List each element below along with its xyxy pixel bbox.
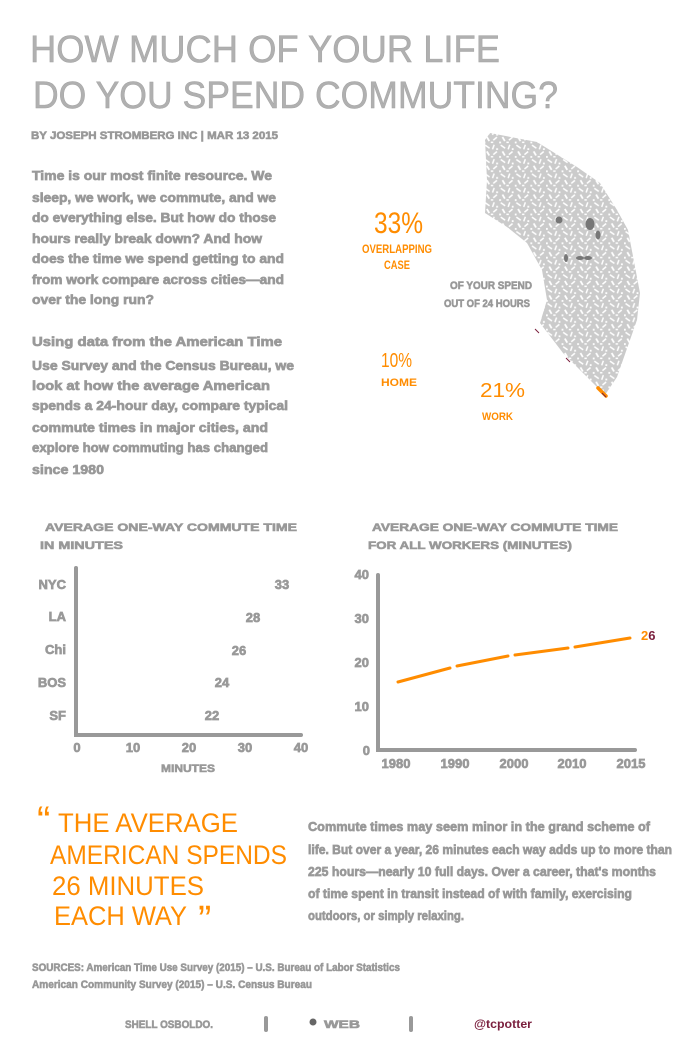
label: sleep share caption: OVERLAPPING (362, 244, 432, 256)
axes (76, 568, 301, 735)
text block: commentary: of time spent in transit instead of with family, exercising (308, 886, 632, 901)
chart: commute time by city (38, 522, 308, 775)
wedge: commute marker (598, 388, 606, 396)
text block: method: Using data from the American Time (32, 334, 282, 349)
heading: trend chart: FOR ALL WORKERS (MINUTES) (368, 540, 572, 552)
byline: BY JOSEPH STROMBERG INC | MAR 13 2015 (31, 130, 278, 142)
label: sleep share caption (362, 244, 432, 272)
trend line (398, 638, 630, 682)
axes (378, 575, 635, 750)
text block: method: spends a 24-hour day, compare typical (32, 398, 288, 413)
text block: method: Use Survey and the Census Bureau, we (32, 358, 294, 373)
y axis labels: 20 (355, 655, 369, 670)
x axis labels: 1980 (382, 756, 410, 771)
label: centre caption: OUT OF 24 HOURS (444, 298, 530, 310)
chart: commute time trend (355, 522, 655, 771)
value labels: 22 (205, 708, 219, 723)
end value label: 26 (641, 628, 655, 643)
x axis labels: 20 (182, 740, 196, 755)
text block: introduction: do everything else. But how do those (32, 210, 276, 225)
city labels: NYC (39, 577, 67, 592)
city labels (38, 577, 67, 723)
heading: city chart (40, 522, 297, 552)
label: leisure caption: HOME (381, 377, 417, 389)
city labels: LA (49, 609, 67, 624)
callout: pull quote: 26 MINUTES (52, 871, 204, 901)
heading: city chart: IN MINUTES (40, 540, 123, 552)
x axis labels: 2010 (558, 756, 586, 771)
label: leisure share: 10% (381, 350, 412, 372)
text block: method (32, 334, 294, 477)
sources (32, 962, 400, 991)
heading: city chart: AVERAGE ONE-WAY COMMUTE TIME (45, 522, 297, 534)
text block: method: since 1980 (32, 462, 104, 477)
x axis labels: 10 (126, 740, 140, 755)
text block: commentary: life. But over a year, 26 minutes each way adds up to more than (308, 842, 672, 857)
title: DO YOU SPEND COMMUTING? (33, 75, 558, 117)
callout: pull quote: AMERICAN SPENDS (50, 840, 287, 870)
city labels: SF (49, 708, 66, 723)
wedge: darker marks (556, 216, 600, 262)
x axis labels (382, 756, 645, 771)
text block: introduction: does the time we spend getting to and (32, 251, 284, 266)
callout: pull quote: EACH WAY (54, 901, 187, 931)
label: sleep share caption: CASE (384, 260, 410, 272)
callout: pull quote: THE AVERAGE (58, 808, 238, 838)
value labels (205, 577, 289, 723)
text block: introduction (32, 168, 284, 307)
y axis labels: 10 (355, 699, 369, 714)
value labels: 24 (215, 675, 230, 690)
y axis labels: 0 (363, 743, 370, 758)
x axis labels (73, 740, 308, 755)
text block: introduction: sleep, we work, we commute, and we (32, 190, 276, 205)
value labels: 33 (275, 577, 289, 592)
chart: 24-hour day wedge (362, 133, 640, 423)
sources: American Community Survey (2015) – U.S. Census Bureau (32, 979, 312, 991)
footer: SHELL OSBOLDO. (125, 1019, 213, 1031)
label: centre caption (444, 280, 532, 310)
footer: WEB (324, 1019, 360, 1031)
text block: method: look at how the average American (32, 378, 270, 393)
x axis labels: 0 (73, 740, 81, 755)
text block: commentary (308, 819, 672, 923)
y axis labels (355, 567, 370, 758)
heading: trend chart: AVERAGE ONE-WAY COMMUTE TIME (372, 522, 618, 534)
text block: introduction: over the long run? (32, 292, 154, 307)
closing quotation mark: ” (198, 898, 211, 942)
title (30, 29, 558, 117)
text block: method: commute times in major cities, and (32, 420, 268, 435)
opening quotation mark: “ (37, 799, 50, 843)
text block: introduction: from work compare across cities—and (32, 272, 284, 287)
wedge: sleep and other hours (485, 133, 640, 395)
x axis labels: 1990 (441, 756, 469, 771)
x axis labels: 2015 (617, 756, 645, 771)
label: sleep share: 33% (374, 207, 423, 240)
x axis labels: 40 (294, 740, 308, 755)
value labels: 28 (246, 610, 260, 625)
label: centre caption: OF YOUR SPEND (450, 280, 532, 292)
callout: pull quote (37, 799, 287, 942)
label: work caption: WORK (482, 411, 513, 423)
text block: commentary: outdoors, or simply relaxing. (308, 908, 464, 923)
city labels: Chi (45, 642, 66, 657)
y axis labels: 40 (355, 567, 369, 582)
wedge: edge ticks (535, 329, 606, 397)
title: HOW MUCH OF YOUR LIFE (30, 29, 500, 71)
city labels: BOS (38, 675, 66, 690)
value labels: 26 (232, 643, 246, 658)
text block: introduction: Time is our most finite resource. We (32, 168, 272, 183)
footer: @tcpotter (474, 1019, 533, 1031)
footer (125, 1016, 533, 1032)
y axis labels: 30 (355, 611, 369, 626)
heading: trend chart (368, 522, 618, 552)
x axis labels: 2000 (500, 756, 528, 771)
text block: introduction: hours really break down? And how (32, 231, 263, 246)
text block: method: explore how commuting has changed (32, 440, 268, 455)
x axis title: MINUTES (161, 763, 215, 775)
x axis labels: 30 (238, 740, 252, 755)
sources: SOURCES: American Time Use Survey (2015) – U.S. Bureau of Labor Statistics (32, 962, 400, 974)
text block: commentary: Commute times may seem minor in the grand scheme of (308, 819, 651, 834)
text block: commentary: 225 hours—nearly 10 full days. Over a career, that's months (308, 864, 656, 879)
label: work share: 21% (480, 380, 525, 402)
